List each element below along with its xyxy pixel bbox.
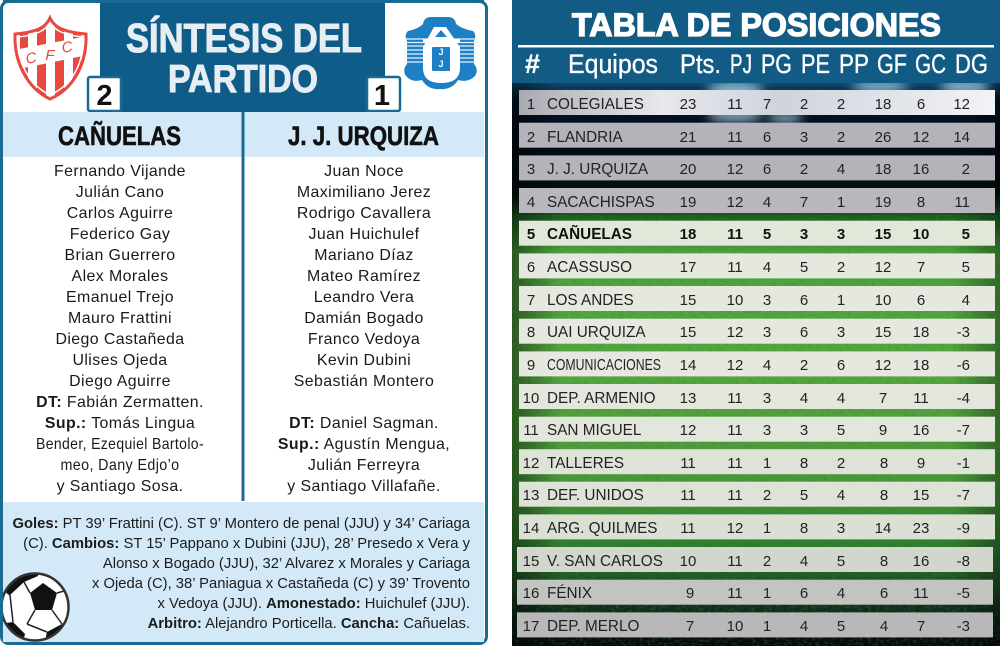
row 12: 2 xyxy=(837,455,845,472)
lineup: Cañuelas: Emanuel Trejo xyxy=(66,289,174,306)
row 15: 5 xyxy=(837,553,845,570)
row 2: 2 xyxy=(837,129,845,146)
row 3: 18 xyxy=(875,161,891,178)
row 11 xyxy=(519,417,995,442)
row 17: 4 xyxy=(880,618,888,635)
team name bands: J. J. URQUIZA xyxy=(288,121,439,151)
row 15 xyxy=(517,547,993,572)
row 15: -8 xyxy=(957,553,970,570)
lineup: J. J. Urquiza: Juan Noce xyxy=(324,163,404,180)
row 2 xyxy=(519,123,995,148)
lineup: J. J. Urquiza: Kevin Dubini xyxy=(317,352,411,369)
lineup: Cañuelas: Mauro Frattini xyxy=(68,310,172,327)
row 7: 10 xyxy=(727,292,743,309)
match details: x Ojeda (C), 38’ Paniagua x Castañeda (C) y 39’ Trovento xyxy=(92,576,470,592)
row 7: 4 xyxy=(962,292,970,309)
row 10: 4 xyxy=(800,390,808,407)
lineup: J. J. Urquiza: Mariano Díaz xyxy=(314,247,414,264)
row 11: -7 xyxy=(957,422,970,439)
row 2: 14 xyxy=(953,129,970,146)
icon: escudo J. J. Urquiza: J xyxy=(438,59,444,69)
row 16: 6 xyxy=(880,585,888,602)
row 13: 13 xyxy=(523,487,539,504)
row 15: 2 xyxy=(763,553,771,570)
table header: PJ xyxy=(730,49,752,79)
row 9: 14 xyxy=(680,357,696,374)
row 8 xyxy=(519,319,995,344)
row 3: 16 xyxy=(913,161,929,178)
lineup: J. J. Urquiza: Julián Ferreyra xyxy=(308,457,420,474)
row 13: 4 xyxy=(837,487,845,504)
row 12: -1 xyxy=(957,455,970,472)
row 9: 9 xyxy=(527,357,535,374)
row 6 xyxy=(519,253,995,278)
row 11: 3 xyxy=(763,422,771,439)
score: Cañuelas xyxy=(88,77,121,112)
lineup: Cañuelas: y Santiago Sosa. xyxy=(57,478,183,495)
row 10: 11 xyxy=(727,390,743,407)
lineup: Cañuelas: Sup.: Tomás Lingua xyxy=(45,415,195,432)
lineup: Cañuelas: Carlos Aguirre xyxy=(67,205,173,222)
row 4: 12 xyxy=(727,194,743,211)
row 7: 15 xyxy=(680,292,696,309)
row 2: 11 xyxy=(727,129,743,146)
row 11: 12 xyxy=(680,422,696,439)
row 17: 1 xyxy=(763,618,771,635)
table header: Pts. xyxy=(680,49,721,79)
table header: PP xyxy=(839,49,869,79)
lineup: J. J. Urquiza: Leandro Vera xyxy=(314,289,414,306)
row 5: Cañuelas highlighted: 3 xyxy=(837,226,845,243)
row 17 xyxy=(517,612,993,637)
title: TABLA DE POSICIONES xyxy=(572,7,941,43)
match details xyxy=(3,502,484,642)
row 1: 7 xyxy=(763,96,771,113)
row 16: 1 xyxy=(763,585,771,602)
row 6: 5 xyxy=(800,259,808,276)
row 4: SACACHISPAS xyxy=(547,194,655,211)
row 14: 11 xyxy=(680,520,696,537)
row 1: 18 xyxy=(875,96,891,113)
icon: escudo Cañuelas: C xyxy=(24,49,38,68)
row 5: Cañuelas highlighted xyxy=(519,221,995,246)
row 4: 4 xyxy=(527,194,535,211)
title: PARTIDO xyxy=(168,58,318,101)
row 10: 7 xyxy=(879,390,887,407)
row 4 xyxy=(519,188,995,213)
lineup: Cañuelas: Julián Cano xyxy=(76,184,164,201)
row 5: Cañuelas highlighted: 5 xyxy=(962,226,970,243)
row 9: 2 xyxy=(800,357,808,374)
row 2: 2 xyxy=(527,129,535,146)
row 11: 5 xyxy=(837,422,845,439)
row 15: 8 xyxy=(880,553,888,570)
row 9: 4 xyxy=(763,357,771,374)
row 16: 11 xyxy=(913,585,929,602)
row 10 xyxy=(519,384,995,409)
row 6: 17 xyxy=(680,259,696,276)
row 17: 5 xyxy=(837,618,845,635)
row 10: 13 xyxy=(680,390,696,407)
table header: # xyxy=(525,49,540,79)
row 17: 10 xyxy=(727,618,743,635)
row 10: 3 xyxy=(763,390,771,407)
row 10: DEP. ARMENIO xyxy=(547,390,656,407)
row 14: 3 xyxy=(837,520,845,537)
lineup: Cañuelas xyxy=(36,163,204,495)
row 16: -5 xyxy=(957,585,970,602)
row 15: 11 xyxy=(727,553,743,570)
row 13: 15 xyxy=(913,487,929,504)
row 14: 12 xyxy=(727,520,743,537)
row 14 xyxy=(519,514,995,539)
row 5: Cañuelas highlighted: 5 xyxy=(527,226,535,243)
row 12: 8 xyxy=(800,455,808,472)
table header xyxy=(525,49,988,79)
lineup: J. J. Urquiza: y Santiago Villafañe. xyxy=(287,478,441,495)
row 16: 9 xyxy=(686,585,694,602)
row 12: 11 xyxy=(680,455,696,472)
row 8: 15 xyxy=(680,324,696,341)
row 9: 12 xyxy=(727,357,743,374)
row 14: 23 xyxy=(913,520,929,537)
lineup: J. J. Urquiza: Sebastián Montero xyxy=(294,373,434,390)
icon: escudo Cañuelas: F xyxy=(45,47,55,64)
panel: tabla de posiciones xyxy=(512,0,1000,646)
row 9 xyxy=(519,351,995,376)
lineup: J. J. Urquiza: Rodrigo Cavallera xyxy=(297,205,431,222)
row 6: 6 xyxy=(527,259,535,276)
row 4: 11 xyxy=(954,194,970,211)
row 7: 6 xyxy=(800,292,808,309)
score: J. J. Urquiza xyxy=(367,77,400,112)
row 9: 18 xyxy=(913,357,929,374)
row 7: 1 xyxy=(837,292,845,309)
lineup: Cañuelas: meo, Dany Edjo’o xyxy=(60,457,180,474)
row 12: 12 xyxy=(523,455,539,472)
row 6: 7 xyxy=(917,259,925,276)
row 8: 3 xyxy=(837,324,845,341)
row 13 xyxy=(519,482,995,507)
lineup: J. J. Urquiza: Maximiliano Jerez xyxy=(297,184,431,201)
row 1: 2 xyxy=(837,96,845,113)
table header: PE xyxy=(801,49,830,79)
row 16: FÉNIX xyxy=(547,585,592,602)
row 17: 4 xyxy=(800,618,808,635)
icon: escudo J. J. Urquiza: J xyxy=(438,47,444,57)
icon: soccer ball xyxy=(3,572,70,642)
row 3: 20 xyxy=(680,161,696,178)
row 5: Cañuelas highlighted: 3 xyxy=(800,226,808,243)
row 6: 2 xyxy=(837,259,845,276)
table header: PG xyxy=(761,49,792,79)
row 17: DEP. MERLO xyxy=(547,618,639,635)
row 1: 12 xyxy=(953,96,970,113)
row 9: 6 xyxy=(837,357,845,374)
row 11: SAN MIGUEL xyxy=(547,422,641,439)
row 1: COLEGIALES xyxy=(547,96,644,113)
row 8: UAI URQUIZA xyxy=(547,324,646,341)
lineup: J. J. Urquiza: Juan Huichulef xyxy=(308,226,420,243)
lineup: J. J. Urquiza: Franco Vedoya xyxy=(308,331,420,348)
row 10: 10 xyxy=(523,390,539,407)
header band xyxy=(3,0,484,112)
row 13: 5 xyxy=(800,487,808,504)
panel: síntesis del partido xyxy=(0,0,486,646)
row 4: 1 xyxy=(837,194,845,211)
match details: x Vedoya (JJU). Amonestado: Huichulef (JJU). xyxy=(158,596,470,612)
row 8: 15 xyxy=(875,324,891,341)
row 3 xyxy=(519,155,995,180)
row 5: Cañuelas highlighted: 10 xyxy=(913,226,929,243)
match details: Alonso x Bogado (JJU), 32’ Alvarez x Morales y Cariaga xyxy=(103,556,471,572)
row 6: 4 xyxy=(763,259,771,276)
row 16: 11 xyxy=(727,585,743,602)
row 6: 5 xyxy=(962,259,970,276)
row 4: 19 xyxy=(680,194,696,211)
row 1: 6 xyxy=(917,96,925,113)
lineup: J. J. Urquiza xyxy=(278,163,450,495)
row 11: 9 xyxy=(879,422,887,439)
row 5: Cañuelas highlighted: 5 xyxy=(763,226,771,243)
team name bands: CAÑUELAS xyxy=(58,120,181,151)
row 13: 11 xyxy=(727,487,743,504)
table header: DG xyxy=(955,49,988,79)
row 14: 14 xyxy=(523,520,539,537)
row 11: 11 xyxy=(523,422,539,439)
row 12: 8 xyxy=(880,455,888,472)
lineup: J. J. Urquiza: Damián Bogado xyxy=(304,310,424,327)
match details: Goles: PT 39’ Frattini (C). ST 9’ Montero de penal (JJU) y 34’ Cariaga xyxy=(12,516,471,532)
row 4: 7 xyxy=(800,194,808,211)
row 12 xyxy=(519,449,995,474)
row 14: -9 xyxy=(957,520,970,537)
row 3: J. J. URQUIZA xyxy=(547,161,649,178)
row 3: 12 xyxy=(727,161,743,178)
row 9: COMUNICACIONES xyxy=(547,357,661,374)
row 4: 8 xyxy=(917,194,925,211)
row 12: 1 xyxy=(763,455,771,472)
table header: GC xyxy=(915,49,946,79)
row 13: 8 xyxy=(880,487,888,504)
lineup: J. J. Urquiza: DT: Daniel Sagman. xyxy=(289,415,439,432)
row 12: 11 xyxy=(727,455,743,472)
row 7 xyxy=(519,286,995,311)
icon: escudo Cañuelas xyxy=(14,18,88,103)
score: Cañuelas: 2 xyxy=(96,80,113,112)
row 16: 6 xyxy=(800,585,808,602)
row 3: 2 xyxy=(962,161,970,178)
lineup: Cañuelas: Ulises Ojeda xyxy=(72,352,168,369)
row 16: 4 xyxy=(837,585,845,602)
row 7: LOS ANDES xyxy=(547,292,634,309)
row 2: 3 xyxy=(800,129,808,146)
row 7: 3 xyxy=(763,292,771,309)
match details: Arbitro: Alejandro Porticella. Cancha: Cañuelas. xyxy=(148,616,470,632)
row 2: 12 xyxy=(913,129,929,146)
row 13: DEF. UNIDOS xyxy=(547,487,644,504)
row 1: 2 xyxy=(800,96,808,113)
row 13: 11 xyxy=(680,487,696,504)
row 17: 17 xyxy=(523,618,539,635)
row 8: 6 xyxy=(800,324,808,341)
row 17: -3 xyxy=(957,618,970,635)
row 3: 2 xyxy=(800,161,808,178)
row 14: 1 xyxy=(763,520,771,537)
lineup: Cañuelas: Diego Aguirre xyxy=(69,373,171,390)
row 2: 6 xyxy=(763,129,771,146)
lineup: Cañuelas: Brian Guerrero xyxy=(65,247,175,264)
row 9: -6 xyxy=(957,357,970,374)
row 6: 11 xyxy=(727,259,743,276)
row 10: 4 xyxy=(837,390,845,407)
row 4: 19 xyxy=(875,194,891,211)
row 12: 9 xyxy=(917,455,925,472)
row 2: 21 xyxy=(680,129,696,146)
row 12: TALLERES xyxy=(547,455,624,472)
row 8: 18 xyxy=(913,324,929,341)
row 4: 4 xyxy=(763,194,771,211)
row 8: 8 xyxy=(527,324,535,341)
lineup: J. J. Urquiza: Sup.: Agustín Mengua, xyxy=(278,436,450,453)
row 7: 6 xyxy=(917,292,925,309)
icon: escudo J. J. Urquiza xyxy=(404,17,478,89)
row 11: 16 xyxy=(913,422,929,439)
row 3: 3 xyxy=(527,161,535,178)
row 3: 4 xyxy=(837,161,845,178)
row 9: 12 xyxy=(875,357,891,374)
row 10: 11 xyxy=(913,390,929,407)
row 6: ACASSUSO xyxy=(547,259,632,276)
row 1: 23 xyxy=(680,96,696,113)
row 16: 16 xyxy=(523,585,539,602)
row 14: 8 xyxy=(800,520,808,537)
row 10: -4 xyxy=(957,390,970,407)
row 6: 12 xyxy=(875,259,891,276)
row 14: 14 xyxy=(875,520,891,537)
row 1: 1 xyxy=(527,96,535,113)
row 15: 4 xyxy=(800,553,808,570)
lineup: Cañuelas: Alex Morales xyxy=(72,268,168,285)
match details: (C). Cambios: ST 15’ Pappano x Dubini (JJU), 28’ Presedo x Vera y xyxy=(23,536,471,552)
row 5: Cañuelas highlighted: 15 xyxy=(875,226,891,243)
team name bands xyxy=(3,112,484,157)
title xyxy=(126,15,362,101)
row 14: ARG. QUILMES xyxy=(547,520,658,537)
row 15: V. SAN CARLOS xyxy=(547,553,663,570)
lineup: Cañuelas: Bender, Ezequiel Bartolo- xyxy=(36,436,204,453)
row 1 xyxy=(519,90,995,115)
row 7: 10 xyxy=(875,292,891,309)
table header: Equipos xyxy=(568,49,658,79)
row 5: Cañuelas highlighted: 11 xyxy=(727,226,743,243)
title: SÍNTESIS DEL xyxy=(126,15,362,61)
table header: GF xyxy=(877,49,907,79)
row 2: 26 xyxy=(875,129,891,146)
row 8: 3 xyxy=(763,324,771,341)
row 17: 7 xyxy=(917,618,925,635)
row 13: -7 xyxy=(957,487,970,504)
row 16 xyxy=(517,580,993,605)
row 11: 3 xyxy=(800,422,808,439)
row 3: 6 xyxy=(763,161,771,178)
row 7: 7 xyxy=(527,292,535,309)
lineup: Cañuelas: Diego Castañeda xyxy=(55,331,185,348)
row 11: 11 xyxy=(727,422,743,439)
row 15: 15 xyxy=(523,553,539,570)
lineup: Cañuelas: Fernando Vijande xyxy=(54,163,186,180)
lineup: J. J. Urquiza: Mateo Ramírez xyxy=(307,268,421,285)
icon: escudo Cañuelas: C xyxy=(60,38,74,57)
row 17: 7 xyxy=(686,618,694,635)
row 15: 16 xyxy=(913,553,929,570)
row 5: Cañuelas highlighted: CAÑUELAS xyxy=(547,225,632,243)
lineup: Cañuelas: DT: Fabián Zermatten. xyxy=(36,394,204,411)
row 5: Cañuelas highlighted: 18 xyxy=(680,226,696,243)
row 2: FLANDRIA xyxy=(547,129,623,146)
row 15: 10 xyxy=(680,553,696,570)
row 1: 11 xyxy=(727,96,743,113)
row 13: 2 xyxy=(763,487,771,504)
lineup: Cañuelas: Federico Gay xyxy=(70,226,170,243)
row 8: -3 xyxy=(957,324,970,341)
row 8: 12 xyxy=(727,324,743,341)
score: J. J. Urquiza: 1 xyxy=(374,80,390,112)
